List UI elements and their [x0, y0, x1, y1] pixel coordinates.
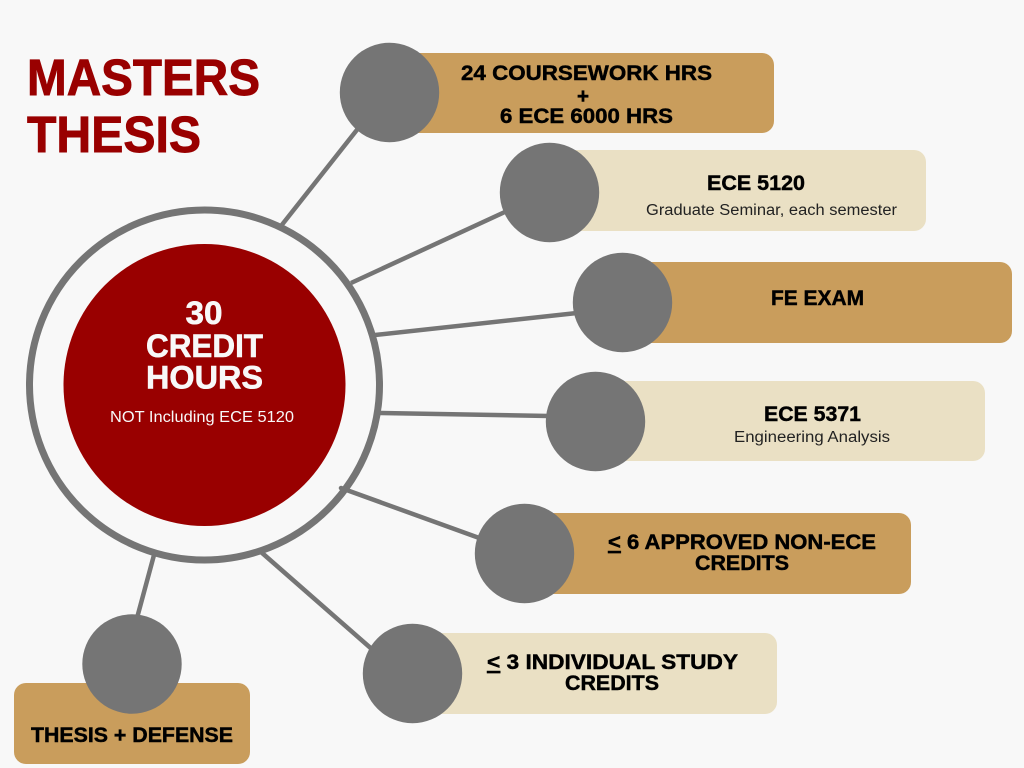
panel: coursework hours: 24 COURSEWORK HRS — [461, 62, 712, 85]
connector lines — [137, 126, 577, 651]
panel: ECE 5120: Graduate Seminar, each semester — [646, 202, 897, 219]
panel: FE exam — [573, 253, 1012, 352]
panel: thesis and defense — [14, 614, 250, 764]
panel: thesis and defense: THESIS + DEFENSE — [31, 724, 233, 747]
panel: coursework hours: 6 ECE 6000 HRS — [500, 105, 673, 128]
central hub: 30 credit hours: HOURS — [146, 360, 263, 396]
panel: individual study credits — [363, 624, 777, 723]
panel: ECE 5371: Engineering Analysis — [734, 429, 890, 446]
panel: individual study credits: < 3 INDIVIDUAL STUDY — [487, 651, 738, 674]
panel: FE exam: FE EXAM — [771, 287, 864, 310]
panel: approved non-ECE credits — [475, 504, 911, 603]
title — [27, 49, 260, 163]
panel: approved non-ECE credits: CREDITS — [695, 552, 789, 575]
panel: ECE 5371 — [546, 372, 985, 471]
central hub: 30 credit hours: 30 — [186, 295, 222, 331]
panel: ECE 5371: ECE 5371 — [764, 403, 861, 426]
panel: coursework hours — [340, 43, 774, 142]
central hub: 30 credit hours — [30, 210, 380, 560]
panel: individual study credits: CREDITS — [565, 672, 659, 695]
panel: ECE 5120: ECE 5120 — [707, 172, 805, 195]
title: MASTERS — [27, 49, 260, 106]
central hub: 30 credit hours: CREDIT — [146, 328, 263, 364]
panel: ECE 5120 — [500, 143, 926, 242]
central hub: 30 credit hours: NOT Including ECE 5120 — [110, 409, 294, 426]
title: THESIS — [27, 106, 201, 163]
panel: coursework hours: + — [577, 85, 589, 108]
panel: approved non-ECE credits: < 6 APPROVED NON-ECE — [608, 531, 876, 554]
